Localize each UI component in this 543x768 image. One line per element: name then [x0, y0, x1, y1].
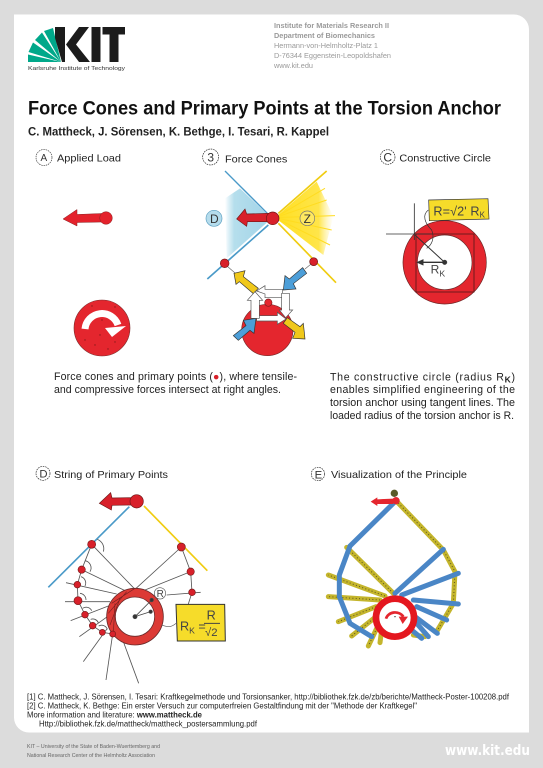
heading E	[311, 467, 467, 481]
panel D: string of primary points	[36, 466, 225, 683]
formula box: R	[207, 608, 216, 622]
heading E: Visualization of the Principle	[331, 470, 467, 481]
rope twist texture	[328, 501, 455, 646]
caption right: enables simplified engineering of the	[330, 384, 515, 396]
anchor ring	[107, 588, 163, 645]
footer association text	[27, 744, 160, 759]
principal stress arrows	[233, 268, 307, 340]
formula box: √2	[205, 627, 218, 639]
heading B: Force Cones	[225, 155, 287, 166]
formula box: R=√2' R	[433, 205, 480, 219]
title: Force Cones and Primary Points at the Torsion Anchor	[28, 98, 501, 120]
load arrow	[371, 497, 400, 506]
tangent lines and radius	[386, 203, 447, 265]
label: R circle: R	[157, 589, 164, 600]
caption right: )	[511, 372, 515, 384]
panel B: force cones	[203, 149, 336, 356]
blue ropes	[339, 501, 458, 638]
references: [1] C. Mattheck, J. Sörensen, I. Tesari: Kraftkegelmethode und Torsionsanker, http://bibliothek.fzk.de/zb/berichte/Mattheck-Poster-100208.pdf	[27, 692, 510, 702]
formula box: K	[189, 625, 195, 635]
references: More information and literature: www.mattheck.de	[27, 710, 202, 720]
force lines	[65, 539, 201, 683]
icon: anchor disk with torque arrow	[74, 300, 130, 356]
heading D	[36, 466, 168, 481]
KIT logo	[28, 27, 125, 72]
tension cone	[275, 171, 336, 283]
panel E: visualization	[311, 467, 467, 646]
institute address: www.kit.edu	[273, 63, 313, 70]
references: Http://bibliothek.fzk.de/mattheck/mattheck_postersammlung.pdf	[39, 718, 258, 728]
primary points string	[74, 540, 195, 637]
panel A: applied load	[36, 150, 130, 356]
constructive ring	[403, 221, 486, 304]
label: RK: R	[431, 262, 439, 276]
institute address: Hermann-von-Helmholtz-Platz 1	[274, 43, 378, 50]
institute address: D-76344 Eggenstein-Leopoldshafen	[274, 53, 391, 60]
heading C: Constructive Circle	[399, 154, 491, 165]
heading C: C	[383, 150, 392, 164]
footer association text: National Research Center of the Helmholtz Association	[27, 753, 155, 759]
heading D: String of Primary Points	[54, 470, 168, 481]
yellow ropes	[328, 501, 455, 646]
panel C: constructive circle	[380, 150, 491, 304]
formula box	[429, 199, 489, 221]
center primary point	[265, 299, 272, 306]
caption right: loaded radius of the torsion anchor is R.	[330, 410, 514, 422]
anchor ring with torque arrow	[376, 599, 414, 637]
caption left: Force cones and primary points (●), where tensile-	[54, 371, 297, 383]
institute address: Institute for Materials Research II	[274, 23, 389, 30]
heading D: D	[39, 469, 48, 481]
heading A	[36, 150, 121, 166]
compression cone	[206, 171, 272, 279]
primary points	[220, 258, 318, 268]
references: [2] C. Mattheck, K. Bethge: Ein erster Versuch zur computerfreien Gestaltfindung mit der "Methode der Kraftkegel"	[27, 700, 417, 710]
caption right: K	[505, 374, 512, 384]
cone edges	[48, 506, 207, 587]
caption right: torsion anchor using tangent lines. The	[330, 397, 515, 409]
label: RK: K	[439, 269, 445, 279]
references	[27, 692, 510, 728]
radius markers	[133, 598, 153, 619]
caption right	[330, 372, 515, 422]
icon: load arrow	[63, 210, 112, 226]
institute address: Department of Biomechanics	[274, 33, 375, 40]
anchor disk	[242, 304, 293, 356]
caption right: The constructive circle (radius R	[330, 372, 504, 384]
heading A: Applied Load	[57, 152, 121, 164]
load arrow	[99, 493, 143, 510]
footer url: www.kit.edu	[445, 743, 530, 759]
formula box: R	[180, 620, 189, 634]
white square of arrows	[247, 286, 293, 324]
formula box: K	[480, 211, 486, 220]
compression cone: D	[210, 212, 219, 226]
heading A: A	[40, 153, 48, 164]
heading C	[380, 150, 491, 165]
knot	[391, 490, 398, 497]
formula box: =	[195, 620, 206, 634]
institute address	[273, 23, 391, 70]
label: R circle	[154, 588, 166, 600]
tension cone: Z	[304, 212, 311, 226]
heading B	[203, 149, 287, 166]
footer association text: KIT – University of the State of Baden-Wuerttemberg and	[27, 744, 160, 750]
authors: C. Mattheck, J. Sörensen, K. Bethge, I. Tesari, R. Kappel	[28, 126, 329, 138]
heading B: 3	[207, 151, 214, 165]
formula box	[162, 604, 225, 641]
caption left: and compressive forces intersect at right angles.	[54, 384, 281, 396]
load arrow and primary point	[237, 209, 279, 226]
caption left	[54, 371, 297, 396]
KIT logo: Karlsruhe Institute of Technology	[28, 66, 125, 72]
heading E: E	[315, 469, 323, 481]
